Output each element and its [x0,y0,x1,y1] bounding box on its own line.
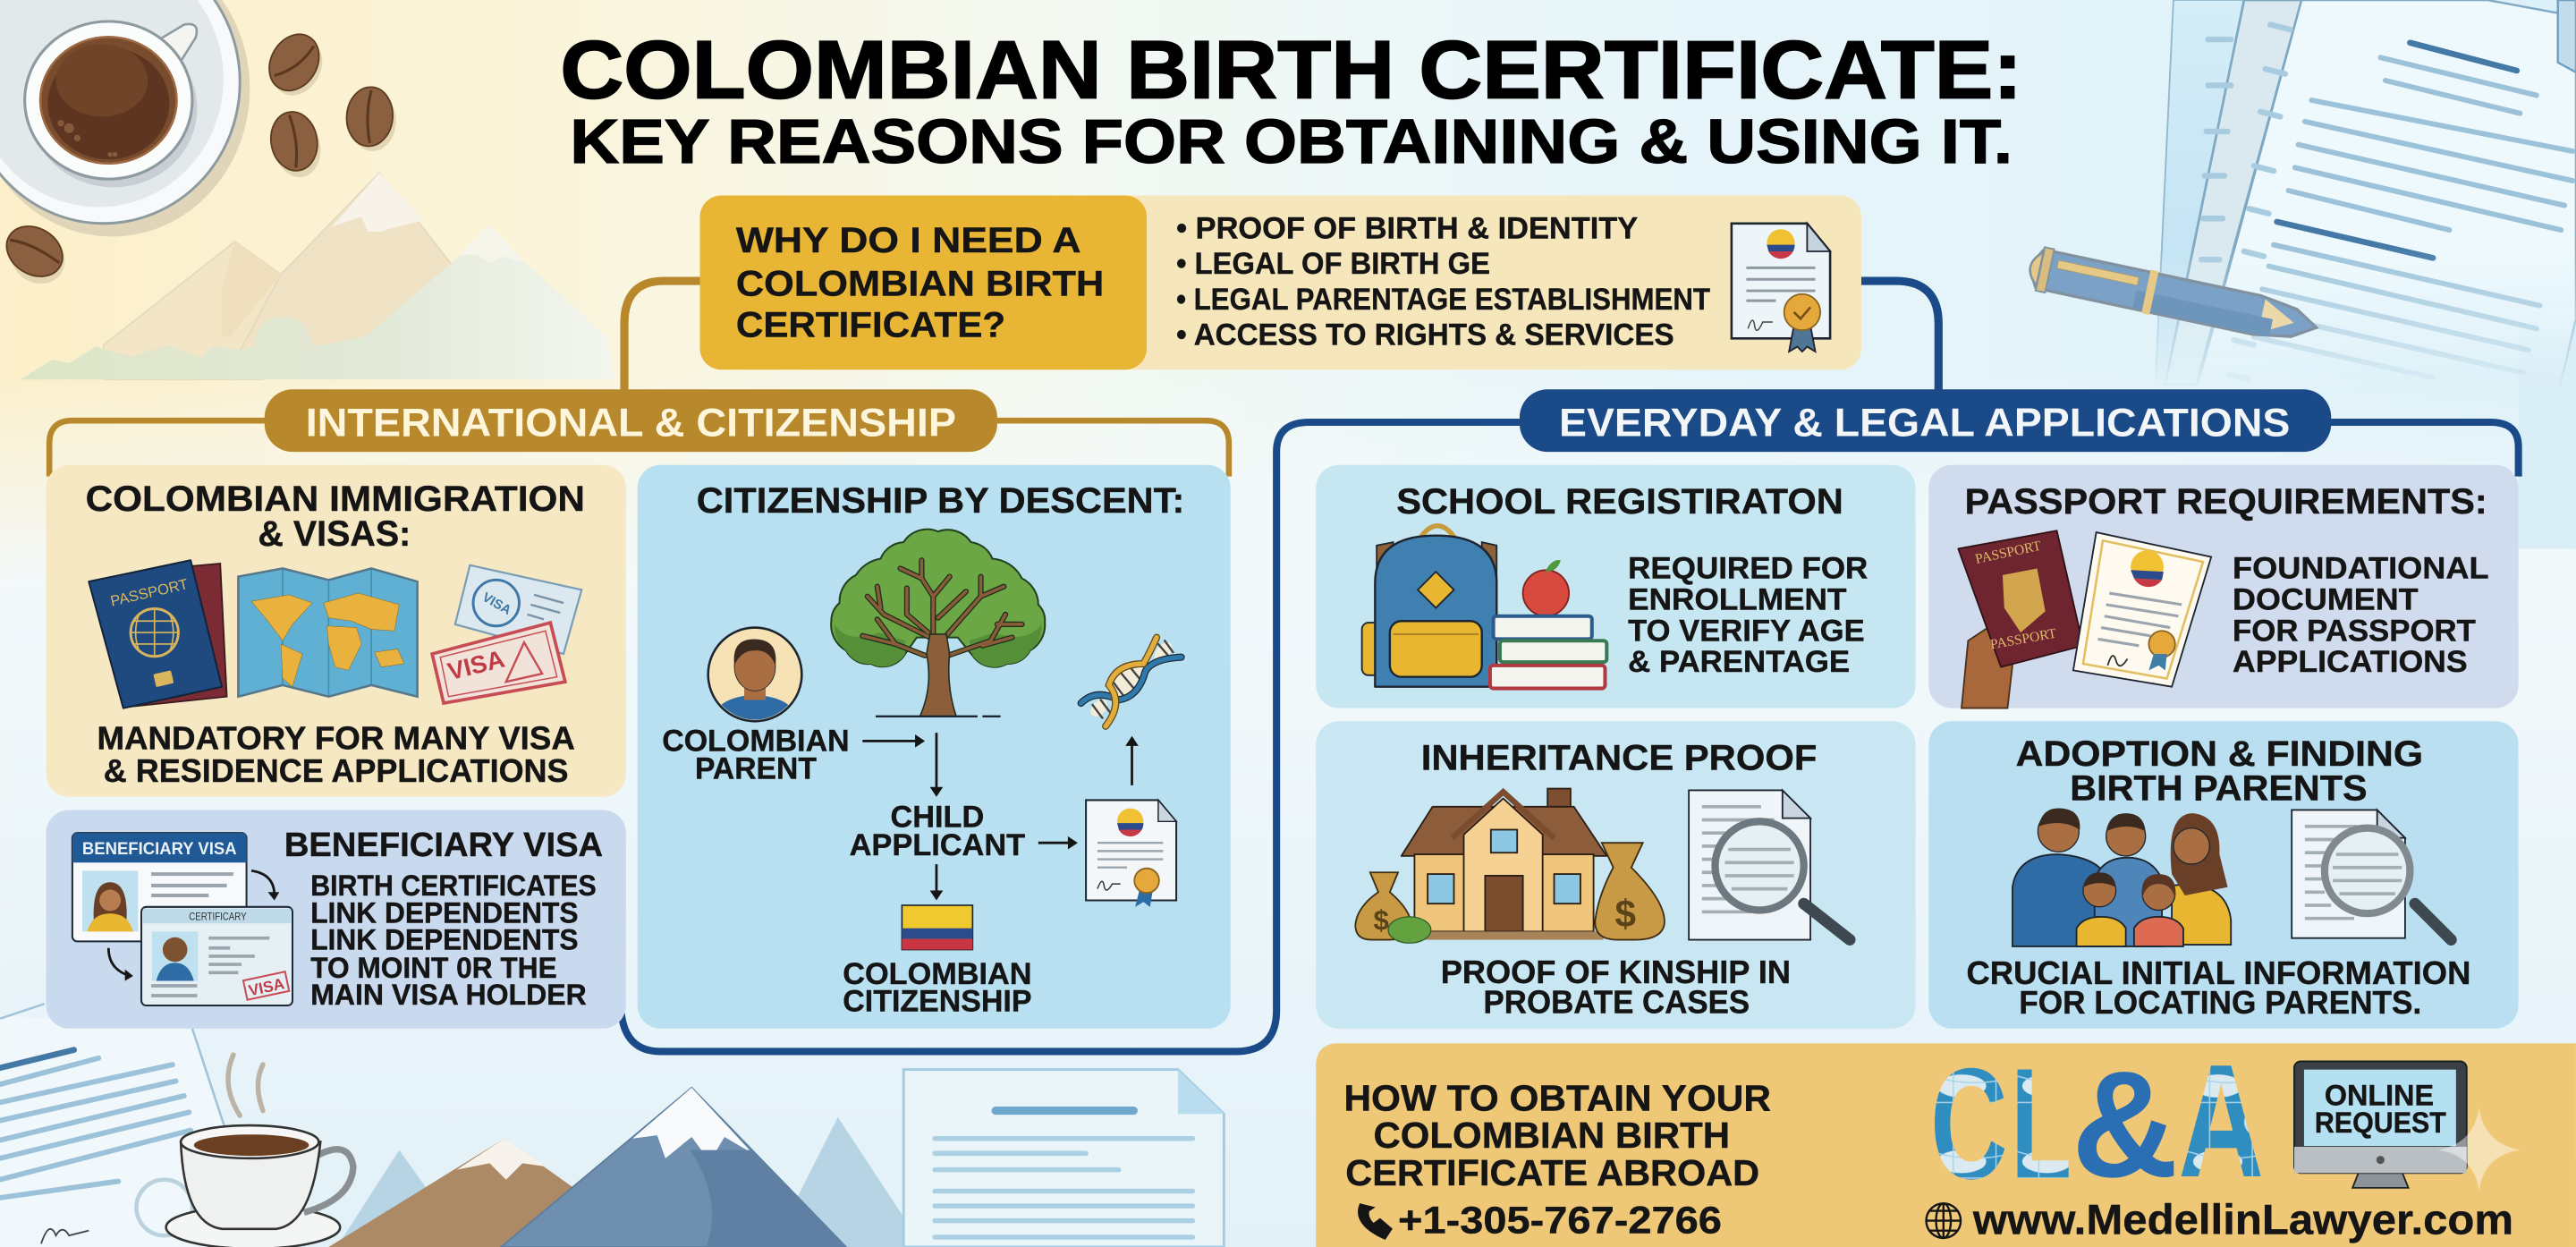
icon: certificate [2073,532,2211,687]
icon: money bags: $ [1614,893,1636,935]
text: & PARENTAGE [1628,645,1850,679]
section pill: international [265,389,997,452]
icon: family [2012,808,2231,946]
logo: A [2178,1031,2264,1211]
heading: PASSPORT REQUIREMENTS: [1965,482,2487,522]
icon: document with magnifier [1689,790,1850,940]
icon: beneficiary card [72,833,247,941]
icon: document with magnifier [2292,810,2451,940]
caption: PROOF OF KINSHIP IN [1441,954,1791,990]
connector: gold [624,281,703,394]
icon: certificate with seal [1732,224,1830,352]
caption: CRUCIAL INITIAL INFORMATION [1967,955,2470,991]
panel: adoption [1928,721,2519,1029]
text: how to obtain: CERTIFICATE ABROAD [1345,1152,1759,1193]
decoration: coffee beans [0,25,397,294]
caption [97,721,575,789]
panel: inheritance proof [1316,721,1916,1029]
text: LINK DEPENDENTS [310,924,579,956]
icon: backpack [1362,526,1496,687]
icon: monitor: ONLINE [2325,1080,2434,1112]
title: KEY REASONS FOR OBTAINING & USING IT. [570,106,2012,176]
icon: visa stamp [432,623,565,703]
icon: family tree [831,530,1045,717]
text: DOCUMENT [2233,582,2419,616]
logo [1930,1031,2264,1212]
caption: FOR LOCATING PARENTS. [2019,985,2421,1021]
why list: • LEGAL PARENTAGE ESTABLISHMENT [1176,283,1710,317]
heading: INHERITANCE PROOF [1421,738,1817,777]
section pill: everyday: EVERYDAY & LEGAL APPLICATIONS [1559,402,2290,445]
icon: certificate id card [141,907,292,1005]
caption: PROBATE CASES [1484,984,1750,1020]
icon: hand with passport: PASSPORT [1989,626,2058,652]
frame: gold section bracket [49,420,1229,477]
connector: blue [1858,281,1938,394]
icon: hand with passport [1958,530,2083,708]
text: TO VERIFY AGE [1628,614,1865,648]
icon: world map [238,568,418,697]
why list [1176,211,1710,352]
decoration: faded mountains [20,173,614,379]
icon: citizenship certificate [1086,800,1176,907]
icon: house [1402,789,1606,940]
text [2233,551,2489,679]
why heading box [699,196,1147,369]
label: child applicant: CHILD [891,801,984,835]
heading: COLOMBIAN IMMIGRATION [86,479,585,519]
heading [86,479,585,554]
logo: C [1930,1036,2007,1212]
decoration: document and ruler top right [2156,0,2576,548]
caption [1967,955,2470,1021]
decoration: pen [2026,245,2321,350]
decoration: steaming coffee cup [137,1055,353,1247]
icon: visa card [455,565,581,654]
text: MAIN VISA HOLDER [310,979,587,1011]
why panel [699,196,1861,369]
label: parent: COLOMBIAN [662,724,850,758]
panel: how to obtain [1316,1031,2576,1247]
icon: certificate id card: CERTIFICARY [189,911,247,923]
why list: • PROOF OF BIRTH & IDENTITY [1176,211,1639,245]
icon: colombian parent [708,628,801,723]
text: how to obtain [1343,1078,1771,1193]
icon: phone [1359,1204,1392,1239]
decoration: document bottom left [0,1004,230,1247]
label: colombian citizenship: CITIZENSHIP [843,984,1031,1018]
heading: ADOPTION & FINDING [2016,734,2423,774]
decoration: back mountains and peaks bottom [328,1088,923,1247]
panel: school registration [1316,465,1916,708]
text [1628,551,1868,679]
icon: passport [89,560,227,708]
logo: L [2011,1036,2072,1212]
text: TO MOINT 0R THE [310,952,557,984]
text: LINK DEPENDENTS [310,896,579,929]
label: colombian citizenship [843,957,1031,1018]
text: REQUIRED FOR [1628,551,1868,585]
decoration: sheet bottom [903,1070,1224,1247]
why heading box: WHY DO I NEED A [736,221,1081,260]
decoration: sparkle [2438,1107,2520,1192]
frame: blue section bracket [621,422,2519,1051]
phone number: +1-305-767-2766 [1398,1199,1722,1241]
decoration: coffee cup from above [0,0,250,236]
icon: money bags [1355,843,1665,943]
why list: • ACCESS TO RIGHTS & SERVICES [1176,318,1674,352]
label: parent: PARENT [695,752,817,786]
text: FOUNDATIONAL [2233,551,2489,585]
panel: passport requirements [1928,465,2519,708]
label: child applicant: APPLICANT [850,828,1025,862]
heading [2016,734,2423,808]
icon: book stack and apple [1490,560,1606,689]
caption [1441,954,1791,1020]
website: www.MedellinLawyer.com [1972,1196,2513,1243]
why heading box: CERTIFICATE? [736,306,1005,345]
section pill: everyday [1520,389,2331,452]
icon: colombian flag [902,905,972,950]
icon: monitor [2294,1061,2467,1188]
icon: passport: PASSPORT [109,575,190,610]
text: FOR PASSPORT [2233,614,2476,648]
icon: certificate id card: VISA [247,974,286,999]
icon: beneficiary card: BENEFICIARY VISA [82,840,237,859]
logo: & [2072,1039,2178,1209]
text: BENEFICIARY VISA [284,826,603,863]
icon: money bags: $ [1374,905,1389,937]
caption: & RESIDENCE APPLICATIONS [104,753,569,789]
arrows: flow [862,733,1139,900]
title [560,24,2022,176]
text: BIRTH CERTIFICATES [310,870,597,902]
icon: monitor: REQUEST [2315,1107,2446,1139]
panel: immigration and visas [47,465,626,797]
text: APPLICATIONS [2233,645,2468,679]
icon: globe [1927,1203,1961,1238]
text: ENROLLMENT [1628,582,1847,616]
caption: MANDATORY FOR MANY VISA [97,721,575,757]
icon: dna helix [1081,638,1182,726]
panel: citizenship by descent [638,465,1231,1029]
icon: hand with passport: PASSPORT [1974,539,2043,567]
section pill: international: INTERNATIONAL & CITIZENSHIP [306,402,956,445]
panel: beneficiary visa [47,810,626,1029]
heading: SCHOOL REGISTIRATON [1396,482,1843,522]
label: parent [662,724,850,786]
text: how to obtain: HOW TO OBTAIN YOUR [1343,1078,1771,1119]
label: child applicant [850,801,1025,862]
text: how to obtain: COLOMBIAN BIRTH [1374,1115,1730,1156]
text [284,826,603,1011]
why list: • LEGAL OF BIRTH GE [1176,247,1490,281]
why heading box: COLOMBIAN BIRTH [736,265,1104,304]
arrows between cards [108,870,279,980]
heading: CITIZENSHIP BY DESCENT: [697,481,1184,521]
heading: BIRTH PARENTS [2070,768,2368,808]
label: colombian citizenship: COLOMBIAN [843,957,1031,991]
title: COLOMBIAN BIRTH CERTIFICATE: [560,24,2022,115]
icon: visa stamp: VISA [445,645,507,685]
icon: visa card: VISA [479,590,513,618]
heading: & VISAS: [258,514,411,554]
